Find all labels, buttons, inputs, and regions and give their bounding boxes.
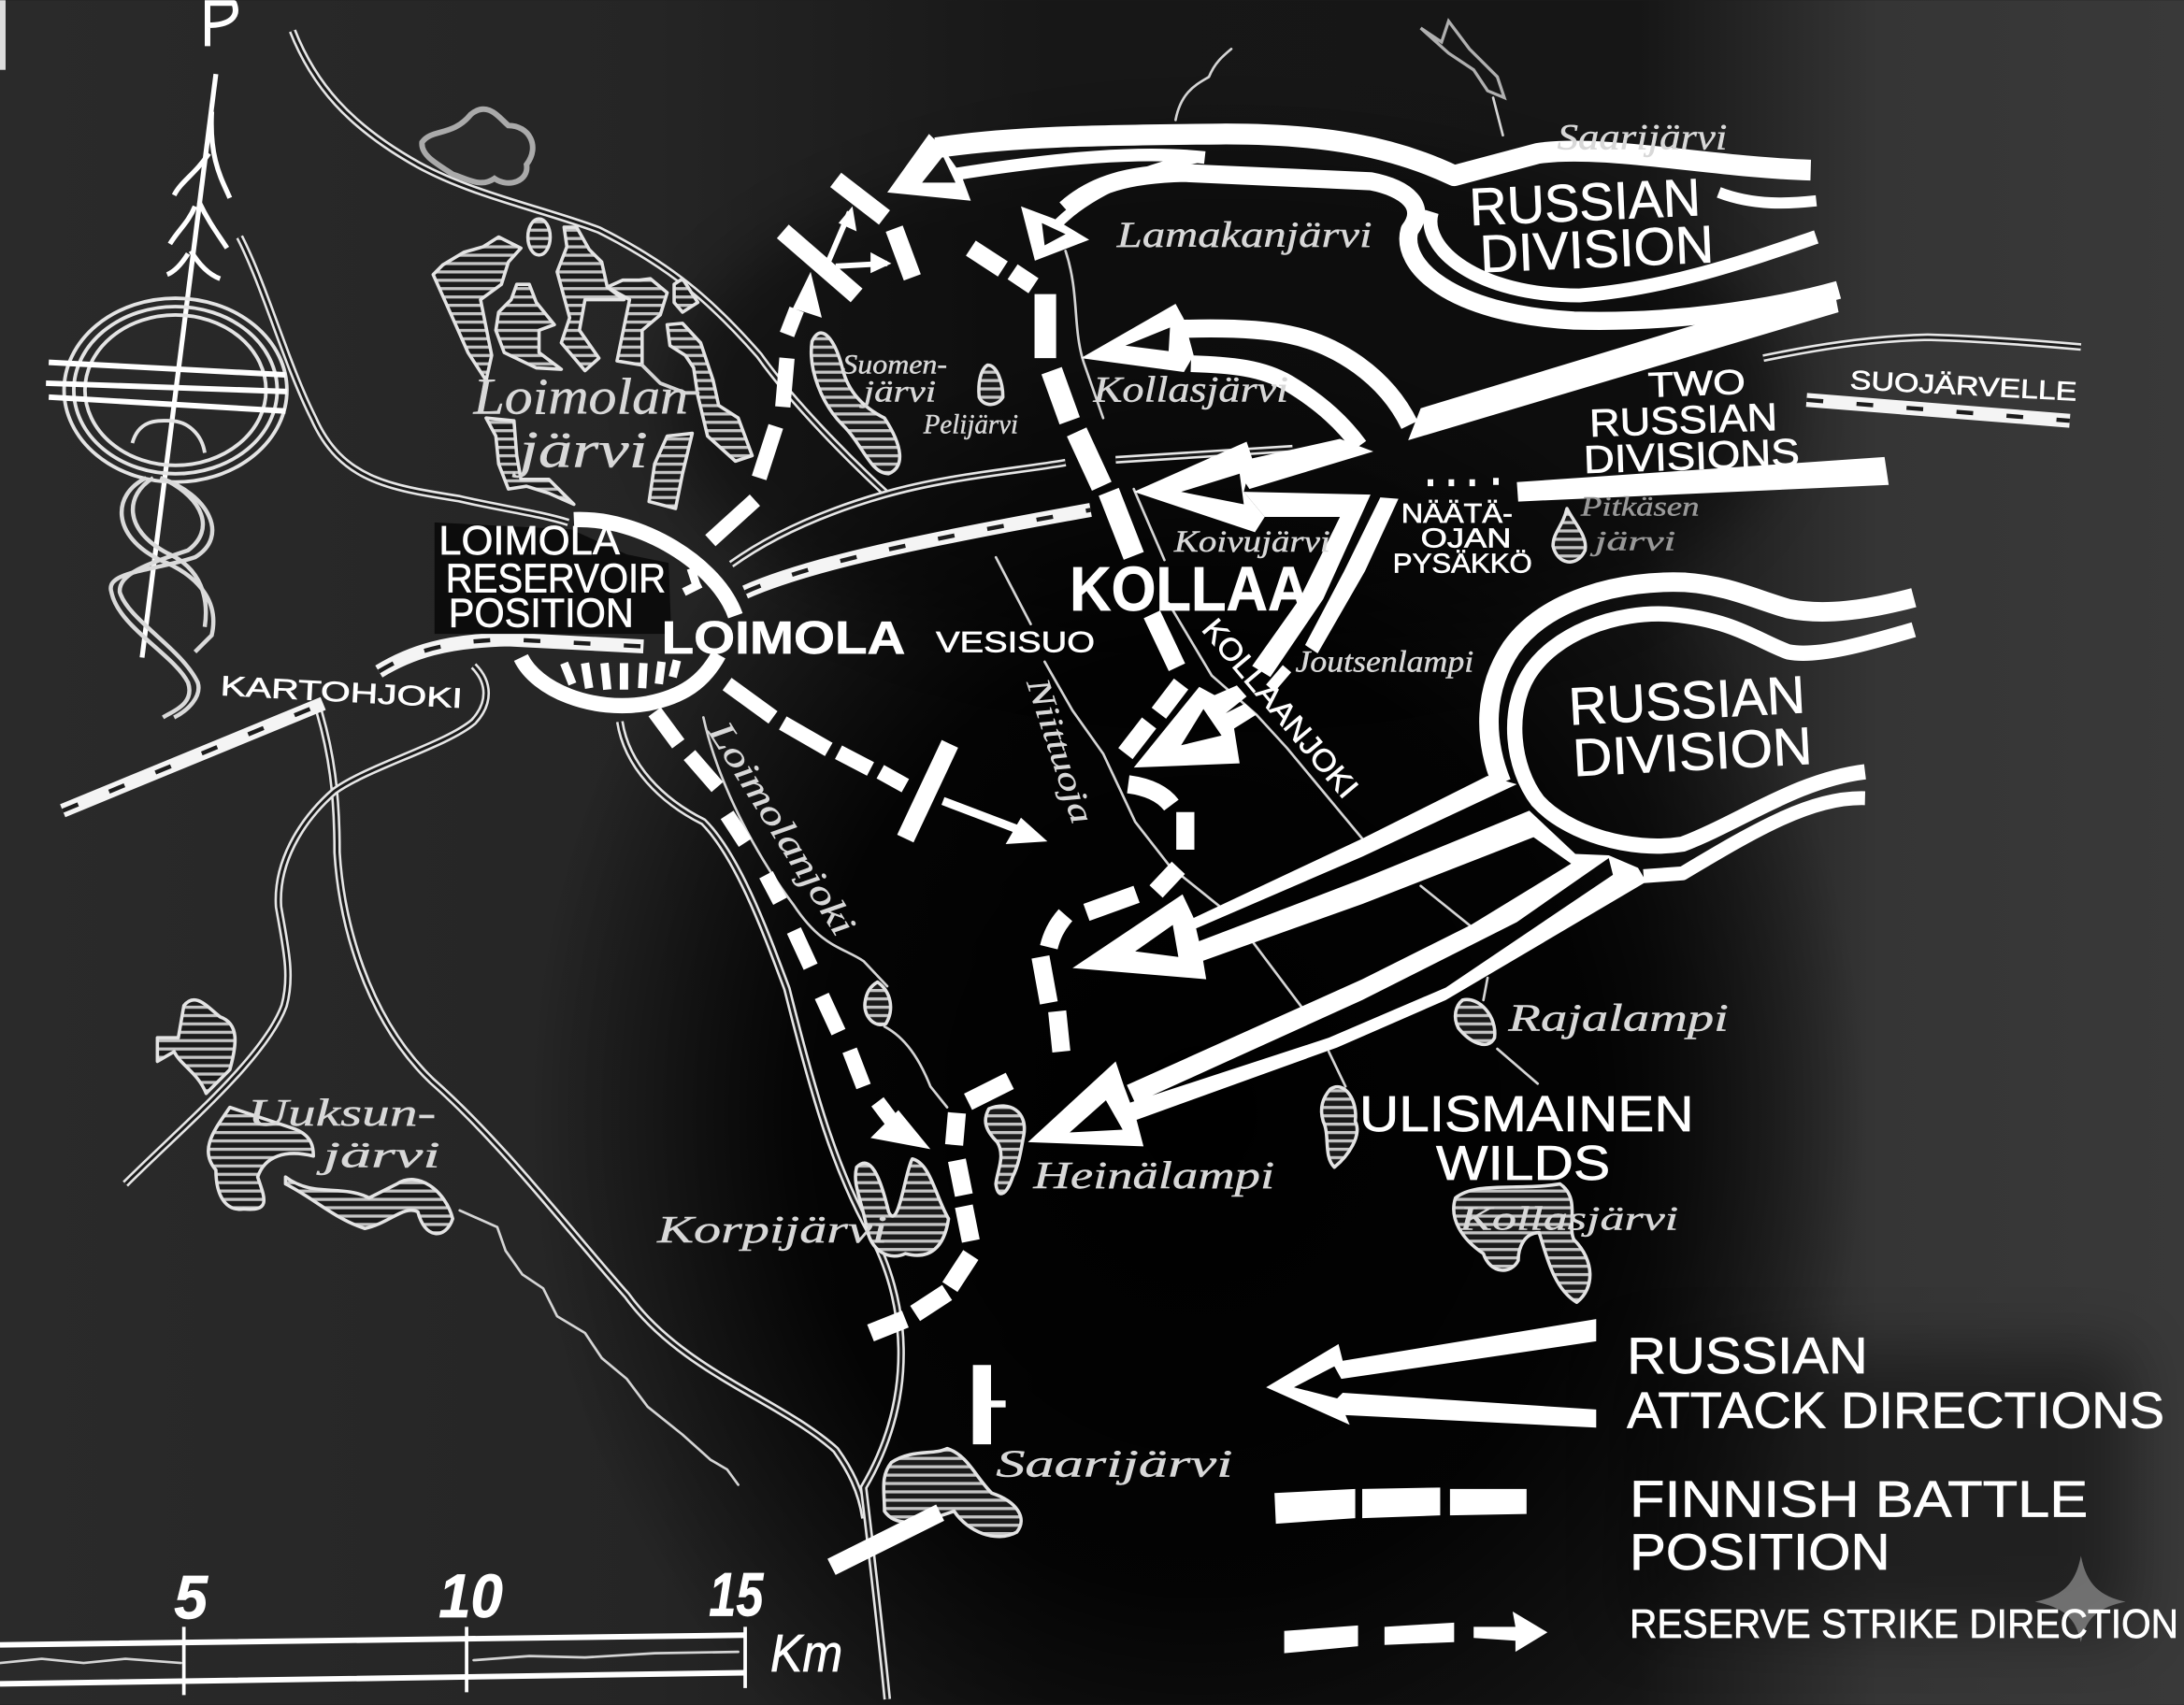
lake: river pond [865,982,891,1024]
two Russian divisions: attack arrows [1081,283,1889,767]
labels: handwritten lake and river names: Uuksun- [248,1092,436,1135]
Russian division north: RUSSIAN [1468,167,1702,236]
Russian division south [1567,665,1814,787]
arrowhead [1072,895,1206,980]
strike north [711,309,797,540]
Kollaa: KOLLAA [1070,554,1309,624]
Loimola: LOIMOLA [662,612,905,664]
Suojärvelle: SUOJÄRVELLE [1849,365,2077,407]
labels: handwritten lake and river names: Korpijärvi [656,1209,887,1252]
lake: Pelijärvi [979,365,1003,405]
band: upper to Finnish centre [1178,776,1516,936]
Loimola reservoir position: RESERVOIR [446,556,666,601]
Kartohjoki: KARTOHJOKI [220,671,464,714]
arrowhead [1081,304,1194,372]
band: middle [1115,810,1646,1120]
scale bar [0,1560,842,1695]
arrowhead [1134,685,1257,767]
Näätäoja halt: OJAN [1421,523,1511,553]
legend: Finnish battle dashes [1274,1487,1527,1524]
Two Russian divisions: DIVISIONS [1583,430,1800,481]
lake: Ulismainen pond [1322,1087,1358,1168]
arrowhead [1027,1061,1143,1146]
Ulismainen wilds: ULISMAINEN [1359,1086,1694,1142]
labels: handwritten lake and river names: Koivujärvi [1173,525,1330,559]
arrowhead [1134,442,1265,532]
arrowhead [887,134,970,201]
labels: handwritten lake and river names: Lamakanjärvi [1116,215,1372,255]
labels: handwritten lake and river names: järvi [859,375,936,408]
scale numbers: 5 [174,1563,208,1631]
legend: Russian attack directions text: RUSSIAN [1627,1326,1868,1384]
north label [208,0,236,46]
labels: handwritten lake and river names: Saarijärvi [1558,118,1727,158]
Russian division south: attack arrows [1027,582,1914,1146]
lake: Uksunjärvi west [157,1000,235,1094]
Loimola reservoir position [438,519,666,637]
Two Russian divisions: RUSSIAN [1588,394,1778,445]
labels: handwritten lake and river names: Rajalampi [1507,997,1729,1040]
lake: small north lake [422,109,533,183]
scale bar: 15 [709,1560,765,1628]
Two Russian divisions: TWO [1647,362,1746,405]
labels: handwritten lake and river names: Loimolan [472,368,688,425]
Russian division north: attack arrows [887,134,1839,321]
lake: Rajalampi [1456,999,1495,1044]
labels: handwritten lake and river names: Kollasjärvi [1092,369,1288,409]
labels: handwritten lake and river names: Niittuoja [1019,672,1101,828]
small strike arrows [828,212,887,266]
lake: Pitkäjärvi [1553,509,1586,562]
lake: Uksunjärvi south arm [285,1177,453,1234]
scale bar: Km [770,1624,842,1683]
Kollaanjoki: KOLLAANJOKI [1196,611,1365,805]
Vesisuo: VESISUO [936,625,1095,658]
labels: handwritten lake and river names: Joutsenlampi [1296,645,1473,679]
legend: Finnish battle position text: POSITION [1630,1523,1890,1581]
legend: Russian attack arrow [1266,1319,1596,1427]
lake: Saarijärvi [884,1449,1021,1537]
labels: handwritten lake and river names: Kollasjärvi [1458,1200,1678,1238]
Näätäoja halt: PYSÄKKÖ [1393,549,1532,579]
Loimola reservoir position: LOIMOLA [438,519,620,564]
labels: main places: WILDS [1436,1137,1610,1191]
Loimola reservoir position [521,520,736,706]
railways [63,400,2070,810]
legend: Russian attack directions text: ATTACK DIRECTIONS [1627,1381,2164,1439]
scale bar: 10 [438,1562,503,1630]
Loimola reservoir position: POSITION [449,592,634,637]
labels: handwritten lake and river names: järvi [512,421,648,478]
Russian division north [1468,167,1715,284]
compass: north arrow [46,0,287,717]
strike southeast [727,684,905,785]
rivers [460,49,1538,1484]
labels: handwritten lake and river names: Pelijärvi [923,409,1018,440]
compass bars [46,363,287,411]
legend: Finnish battle position text: FINNISH BATTLE [1630,1470,2088,1528]
lakes [157,21,1590,1537]
compass rings [65,298,287,482]
labels: handwritten lake and river names: Saarijärvi [996,1442,1232,1485]
labels: main places [220,167,2077,1191]
Näätäoja halt: NÄÄTÄ- [1401,498,1513,528]
legend: reserve strike arrow [1285,1612,1547,1654]
Finnish battle position dashes [783,179,1287,1567]
legend: Finnish battle position text [1630,1470,2088,1581]
labels: handwritten lake and river names [248,118,1729,1485]
labels: handwritten lake and river names: Heinälampi [1032,1154,1274,1197]
lake: Kollasjärvi south [1454,1184,1590,1302]
legend: Russian attack directions text [1627,1326,2164,1439]
Two Russian divisions [1580,360,1800,481]
Russian division south: RUSSIAN [1567,665,1806,736]
lake: Suomenjärvi [812,333,899,474]
lake: northern stream [1421,21,1504,98]
helix [110,478,213,717]
arrowhead [1021,207,1089,261]
labels: handwritten lake and river names: järvi [1589,526,1675,557]
labels: handwritten lake and river names: Loimolanjoki [700,713,864,942]
lake: Korpijärvi [855,1159,949,1256]
lake: Loimolanjärvi [433,219,752,509]
strike south [654,712,894,1125]
legend [1266,1319,2178,1654]
labels: handwritten lake and river names: Suomen- [842,350,947,380]
Näätäoja halt [1393,498,1532,579]
reserve strike arrows [654,207,1047,1149]
labels: handwritten lake and river names: Pitkäsen [1580,491,1700,522]
dark label backing [435,523,671,634]
lake: Uksunjärvi east [208,1108,313,1210]
watermark star [2035,1555,2125,1642]
Russian division south: DIVISION [1572,716,1814,787]
lake: Heinälampi [985,1106,1025,1194]
Russian division north: DIVISION [1478,214,1715,283]
labels: handwritten lake and river names: järvi [315,1136,440,1176]
